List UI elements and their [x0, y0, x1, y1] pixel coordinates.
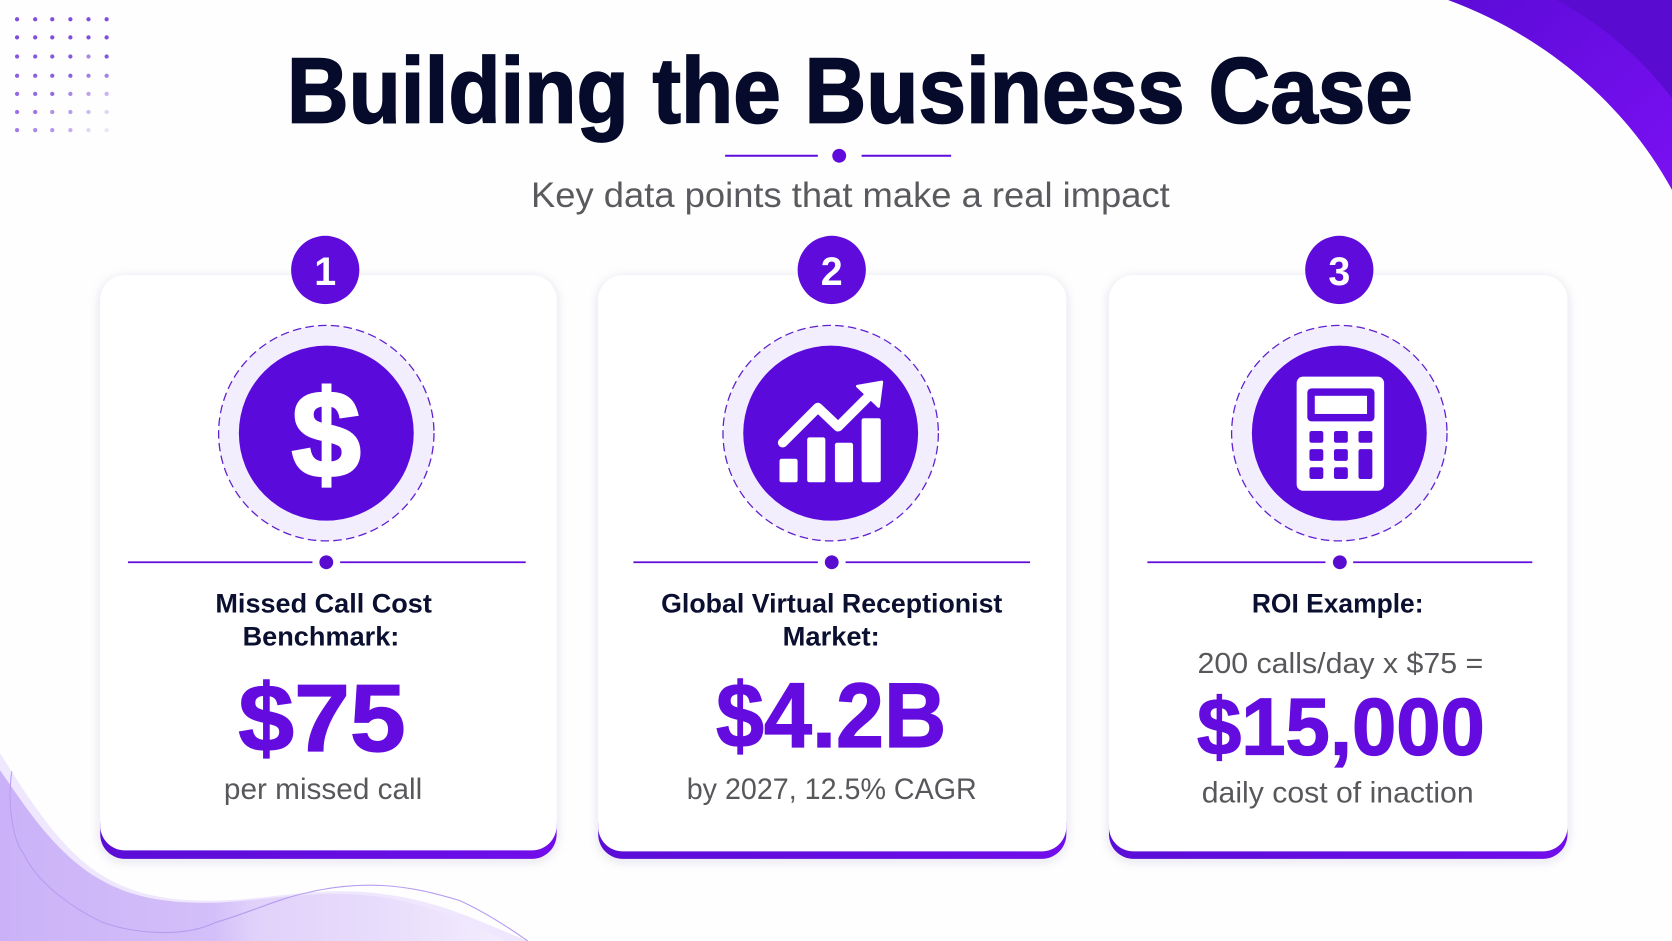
number badge 3: [1305, 236, 1373, 304]
card background: [1109, 275, 1568, 859]
card divider: [1147, 555, 1532, 569]
card background: [598, 275, 1066, 859]
caption: per missed call: [224, 773, 422, 806]
caption: daily cost of inaction: [1202, 776, 1474, 809]
decoration: top-right purple swoosh: [1448, 0, 1672, 190]
number badge 3: 3: [1328, 250, 1350, 294]
card divider: [128, 555, 526, 569]
decoration: dot grid: [15, 17, 109, 132]
panel: ROI example card: [1109, 236, 1568, 859]
calculation: 200 calls/day x $75 =: [1197, 648, 1483, 680]
caption: by 2027, 12.5% CAGR: [687, 773, 977, 806]
value: $75: [238, 665, 406, 772]
number badge 2: 2: [821, 250, 843, 294]
title divider: [725, 149, 951, 163]
heading: Missed Call Cost: [215, 588, 432, 618]
decoration: bottom-left lilac wave: [0, 753, 528, 941]
number badge 1: 1: [314, 250, 336, 294]
icon: growth chart: [723, 325, 938, 541]
icon: dollar sign: $: [292, 366, 361, 504]
heading: Market:: [783, 621, 880, 651]
subtitle: Key data points that make a real impact: [531, 176, 1170, 215]
icon: dollar sign: [219, 325, 434, 541]
number badge 2: [798, 236, 866, 304]
heading: ROI Example:: [1252, 588, 1424, 618]
card background: [100, 275, 557, 859]
heading: Global Virtual Receptionist: [661, 588, 1002, 618]
icon: calculator: [1232, 325, 1447, 541]
panel: market size card: [598, 236, 1066, 859]
value: $4.2B: [716, 665, 946, 767]
card divider: [633, 555, 1030, 569]
title: Building the Business Case: [287, 39, 1413, 143]
heading: Benchmark:: [243, 621, 399, 651]
panel: missed call cost card: [100, 236, 557, 859]
value: $15,000: [1197, 682, 1485, 772]
number badge 1: [291, 236, 359, 304]
